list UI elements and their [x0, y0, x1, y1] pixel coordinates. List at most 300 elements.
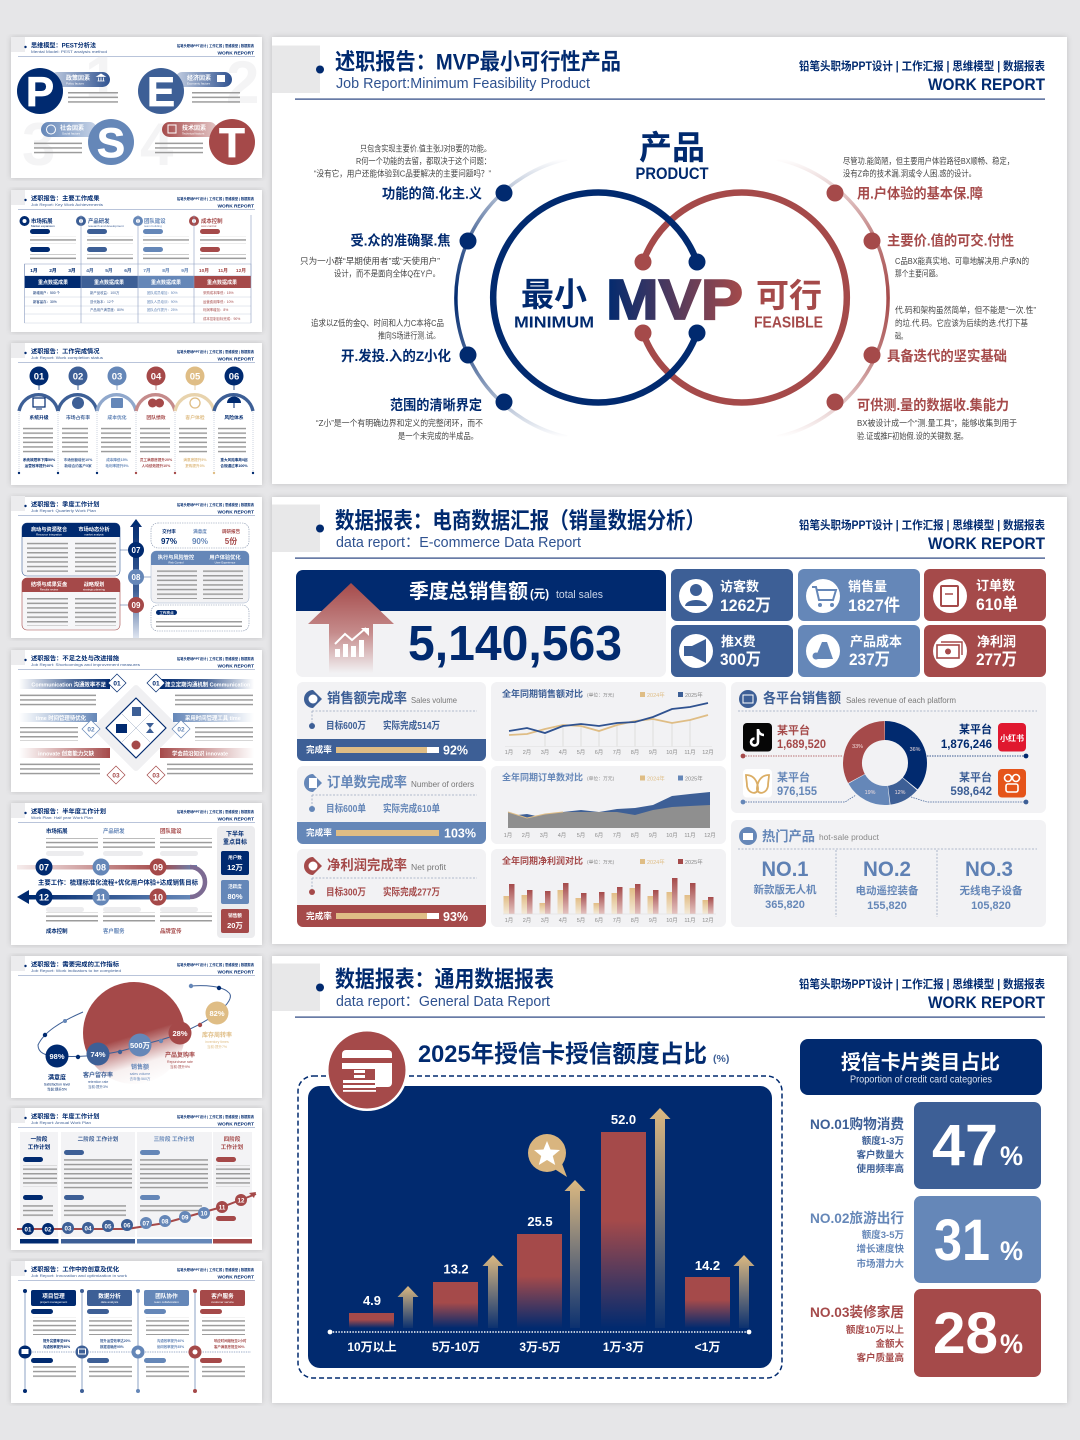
card headers: 数据分析: [98, 1292, 121, 1300]
key results bands: 重点数据成果: [38, 279, 68, 286]
card: profit completion: [297, 849, 486, 927]
panel header: 铅笔头职场PPT设计 | 工作汇报 | 思维模型 | 数据报表: [799, 518, 1045, 532]
panel: general data report: [272, 956, 1067, 1403]
card: profit completion: 完成率: [306, 910, 332, 921]
right column: features: 尽管功.能简陋，但主要用户体验路径BX顺畅、稳定，: [843, 156, 1014, 166]
left cards: 结项与成果复盘: [31, 580, 67, 588]
thumbnail header: 述职报告：工作中的创意及优化: [31, 1266, 120, 1274]
column labels: 风险体系: [224, 414, 244, 421]
chart: annual sales line comparison: 2024年: [647, 691, 665, 699]
month table: 7月: [143, 268, 151, 274]
column results: 系统故障率下降50%: [23, 457, 56, 462]
key results bands: 重点数据成果: [151, 279, 181, 286]
column headings: team building: [144, 224, 162, 228]
blue ring: [493, 192, 706, 403]
panel: hot-sale products: 热门产品: [762, 828, 815, 844]
PEST: T block: Technical factors: [182, 132, 205, 136]
category 28%: [810, 1289, 1041, 1377]
panel header: [272, 46, 1046, 100]
column headings: cost control: [201, 224, 217, 228]
PEST: S block: 社会因素: [60, 124, 84, 132]
card: orders completion: 订单数完成率: [327, 774, 407, 790]
panel header: WORK REPORT: [928, 534, 1046, 553]
platform: butterfly brand: 某平台: [777, 770, 810, 784]
stage headings: 一阶段: [31, 1135, 48, 1143]
chart: annual sales line comparison: 2025年: [685, 691, 703, 699]
thumbnail header: [11, 190, 255, 210]
PEST: P block: Policy factors: [66, 82, 84, 86]
card: profit completion: 目标300万: [326, 886, 366, 898]
thumbnail: annual work plan: [11, 1108, 262, 1250]
chart: annual sales line comparison: 11月: [684, 749, 696, 756]
left column: features: 受.众的准确聚.焦: [350, 232, 450, 248]
chart: annual orders area comparison: 2024年: [647, 774, 665, 782]
chart: annual profit bar comparison: 2月: [523, 917, 531, 924]
column labels: 成本优化: [107, 414, 127, 421]
platform: xiaohongshu: 1,876,246: [941, 739, 992, 751]
KPI: net profit: [924, 625, 1046, 677]
categories header: 授信卡片类目占比: [841, 1051, 1000, 1074]
column results: 人均绩效提升10%: [142, 463, 171, 468]
panel: platform revenue: [731, 682, 1046, 813]
left cards: 启动与资源整合: [31, 525, 68, 533]
thumbnail: PEST analysis: 4: [140, 111, 174, 178]
card: profit completion: 净利润完成率: [327, 857, 407, 873]
second half targets panel: 12万: [227, 863, 243, 872]
KPI: sales volume: 销售量: [848, 579, 887, 594]
card: orders completion: 103%: [444, 826, 476, 840]
platform: tiktok: 1,689,520: [777, 739, 826, 751]
card headers: 团队协作: [155, 1292, 178, 1300]
chart: annual profit bar comparison: 4月: [559, 917, 567, 924]
thumbnail: half year work plan: [11, 803, 262, 945]
month table: 1月: [30, 268, 38, 274]
card copy: [33, 1317, 245, 1380]
chart: annual profit bar comparison: 2025年: [685, 858, 703, 866]
card results: 提升完整率至95%: [43, 1338, 70, 1343]
thumbnail header: 述职报告：不足之处与改进措施: [31, 654, 120, 662]
thumbnail header: [11, 343, 255, 363]
numbered diamonds: 03: [112, 772, 120, 780]
indicator labels: inventory times: [205, 1040, 229, 1044]
donut labels: 19%: [865, 790, 876, 796]
gold arrows: [398, 1108, 754, 1328]
left column: features: “Z小”是一个有明确边界和定义的完整闭环，而不: [316, 418, 484, 428]
indicator nodes: 28%: [172, 1029, 188, 1038]
number badges: 04: [151, 372, 162, 382]
thumbnail header: Job Report: Work completion status: [31, 356, 103, 360]
PEST: E block: E: [147, 68, 175, 115]
PEST: P block: P: [26, 68, 54, 115]
category 28%: NO.03装修家居: [810, 1304, 904, 1320]
card results: 响应时间缩短至2小时: [214, 1338, 247, 1343]
panel: hot-sale products: 新款版无人机: [754, 883, 817, 896]
panel header: [272, 964, 1046, 1018]
chart: annual profit bar comparison: 2024年: [647, 858, 665, 866]
thumbnail header: 铅笔头职场PPT设计 | 工作汇报 | 思维模型 | 数据报表: [177, 349, 255, 354]
chart: annual sales line comparison: 全年同期销售额对比: [502, 688, 583, 699]
thumbnail: work indicators: [11, 956, 262, 1098]
chart: annual sales line comparison: 4月: [559, 749, 567, 756]
chart: annual profit bar comparison: 11月: [684, 917, 696, 924]
feasible label: FEASIBLE: [754, 314, 823, 332]
item headings: 产品研发: [103, 827, 125, 835]
chart: annual orders area comparison: 7月: [613, 832, 621, 839]
thumbnail header: 铅笔头职场PPT设计 | 工作汇报 | 思维模型 | 数据报表: [177, 1114, 255, 1119]
category 47%: 额度1-3万: [862, 1135, 904, 1147]
item headings: 品牌宣传: [160, 927, 182, 935]
right bars: 采用时间管理工具 time: [185, 714, 241, 722]
arches: [19, 395, 253, 411]
total sales card: 5,140,563: [408, 617, 622, 671]
thumbnail header: [11, 803, 255, 823]
indicator labels: 去年值:560万: [130, 1076, 151, 1081]
chart: annual orders area comparison: 12月: [704, 832, 716, 839]
panel: hot-sale products: 105,820: [971, 900, 1011, 912]
chart: annual orders area comparison: 10月: [666, 832, 678, 839]
thumbnail header: [11, 650, 255, 670]
thumbnail header: Mental Model: PEST analysis method: [31, 50, 107, 54]
left column: features: 只包含实现主要价.值主张J对B要的功能。: [360, 144, 491, 154]
second half targets panel: 20万: [227, 921, 243, 930]
platform: kuaishou: 598,642: [950, 786, 992, 798]
right column: features: 那个主要问题。: [895, 268, 942, 278]
indicator nodes: 74%: [90, 1050, 106, 1059]
thumbnail header: [11, 37, 255, 57]
axis labels: 10万以上: [347, 1340, 397, 1354]
thumbnail header: 铅笔头职场PPT设计 | 工作汇报 | 思维模型 | 数据报表: [177, 809, 255, 814]
numbered diamonds: 01: [113, 680, 121, 688]
column headings: [20, 216, 223, 228]
total sales card: (元): [530, 587, 549, 601]
chart: annual orders area comparison: 6月: [595, 832, 603, 839]
timeline nodes: 06: [124, 1222, 131, 1230]
stage tags: [23, 1150, 236, 1221]
chart: annual profit bar comparison: 7月: [613, 917, 621, 924]
number badges: 01: [34, 372, 45, 382]
results table: [24, 215, 251, 323]
category 31%: 31: [934, 1208, 990, 1273]
thumbnail: PEST analysis: 2: [226, 49, 259, 116]
chart: annual sales line comparison: 12月: [702, 749, 714, 756]
panel: platform revenue: 各平台销售额: [763, 690, 841, 706]
panel: MVP report: [272, 37, 1067, 484]
month table: 5月: [105, 268, 113, 274]
column labels: 市场占有率: [66, 414, 90, 421]
panel: hot-sale products: NO.1: [762, 858, 809, 881]
stage headings: 工作计划: [221, 1143, 244, 1151]
left cards: Resource integration: [36, 532, 62, 536]
indicator labels: Repurchase rate: [167, 1060, 193, 1064]
platform: xiaohongshu: 某平台: [959, 722, 992, 736]
indicator labels: 当前:提升3%: [88, 1084, 108, 1089]
left bars: innovate 创意能力欠缺: [38, 750, 95, 758]
category 31%: 额度3-5万: [862, 1229, 904, 1241]
panel header: WORK REPORT: [928, 75, 1046, 94]
thumbnail: quarterly work plan: [11, 496, 262, 638]
column results: 毛利率提升5%: [105, 463, 129, 468]
category 31%: NO.02旅游出行: [810, 1210, 904, 1226]
thumbnail header: 述职报告：季度工作计划: [31, 500, 100, 508]
chart: annual orders area comparison: 全年同期订单数对比: [502, 772, 583, 782]
product heading: [636, 129, 709, 183]
outer arc nodes: [460, 184, 880, 410]
bar values: 4.9: [363, 1293, 381, 1308]
results table: 新增用户：500 个: [33, 290, 61, 295]
axis icons: [18, 1346, 202, 1358]
item copy: [46, 838, 212, 922]
left column: features: 范围的清晰界定: [390, 397, 482, 413]
icon: credit card and coins: [326, 1029, 408, 1111]
thumbnail header: WORK REPORT: [218, 816, 254, 822]
card headers: data analysis: [101, 1300, 119, 1304]
left column: features: 只为一小群“早期使用者”或“天使用户”: [300, 256, 440, 266]
bar values: 52.0: [611, 1112, 636, 1127]
chart: annual orders area comparison: [491, 766, 726, 844]
column results: 复购提升3%: [185, 463, 206, 468]
work highlights box: 工作亮点: [159, 610, 174, 615]
KPI: promotion cost: 300万: [720, 650, 761, 669]
column results: 重大风险事故0起: [220, 457, 248, 462]
card results: 客户满意度提至90%: [214, 1344, 245, 1349]
KPI: sales volume: [798, 569, 920, 621]
right column: features: 的垃.代.码。它应该为后续的迭.代打下基: [895, 318, 1029, 328]
month table: 2月: [49, 268, 57, 274]
work highlights box: [151, 605, 249, 631]
numbered diamonds: 02: [87, 726, 95, 734]
category 47%: 47: [932, 1113, 998, 1178]
left cards: market analysis: [84, 532, 104, 536]
month table: 11月: [218, 268, 228, 274]
thumbnail: shortcomings and improvements: [11, 650, 262, 792]
main work line: 主要工作：梳理标准化流程+优化用户体验+达成销售目标: [38, 878, 199, 886]
thumbnail header: WORK REPORT: [218, 1274, 254, 1280]
chart: annual sales line comparison: 2月: [523, 749, 531, 756]
thumbnail header: 思维模型：PEST分析法: [31, 42, 96, 50]
timeline nodes: 12: [39, 892, 49, 902]
chart: annual orders area comparison: 9月: [649, 832, 657, 839]
chart: annual orders area comparison: 2月: [522, 832, 530, 839]
indicator nodes: [46, 1002, 228, 1068]
timeline nodes: 04: [85, 1226, 92, 1232]
chart: annual sales line comparison: 8月: [631, 749, 639, 756]
x axis: [328, 1330, 751, 1334]
results table: 产品用户满意度：80%: [90, 307, 124, 312]
thumbnail header: WORK REPORT: [218, 356, 254, 362]
key results bands: 重点数据成果: [207, 279, 237, 286]
categories header: Proportion of credit card categories: [850, 1074, 992, 1086]
donut labels: [852, 744, 921, 796]
right column: features: [843, 156, 1036, 441]
bar values: 14.2: [695, 1258, 720, 1273]
timeline nodes: 03: [65, 1226, 72, 1232]
bar values: 13.2: [443, 1262, 469, 1276]
card results: 沟通效率提升40%: [157, 1338, 184, 1343]
panel header: 述职报告：MVP最小可行性产品: [335, 50, 621, 74]
thumbnail header: 铅笔头职场PPT设计 | 工作汇报 | 思维模型 | 数据报表: [177, 962, 255, 967]
platform: butterfly brand: 976,155: [777, 786, 818, 798]
chart: annual orders area comparison: 8月: [631, 832, 639, 839]
column results: 合规通过率100%: [220, 463, 248, 468]
thumbnail header: [11, 956, 255, 976]
card: sales completion: Sales volume: [411, 695, 457, 705]
card: sales completion: 目标600万: [326, 719, 366, 732]
results table: 新客留存：30%: [33, 299, 57, 304]
results table: 利润率增加：8%: [203, 307, 228, 312]
timeline nodes: 10: [201, 1210, 208, 1218]
left cards: Results review: [40, 588, 59, 592]
right column: features: 用.户体验的基本保.障: [857, 186, 983, 202]
PEST: S block: [34, 119, 134, 166]
chart: annual orders area comparison: 2025年: [685, 774, 703, 782]
panel header: data report：General Data Report: [336, 994, 550, 1010]
minimum label: 最小: [521, 276, 587, 313]
item headings: 客户服务: [103, 927, 125, 935]
second half targets panel: 下半年: [226, 830, 244, 838]
thumbnail header: 铅笔头职场PPT设计 | 工作汇报 | 思维模型 | 数据报表: [177, 502, 255, 507]
timeline nodes: 07: [143, 1220, 150, 1228]
thumbnail header: 铅笔头职场PPT设计 | 工作汇报 | 思维模型 | 数据报表: [177, 43, 255, 48]
card results: [43, 1338, 247, 1349]
thumbnail header: Job Report: Innovation and optimization in work: [31, 1274, 127, 1278]
right KPI box: 交付率: [162, 528, 176, 535]
category 28%: 额度10万以上: [846, 1324, 904, 1336]
chart: annual sales line comparison: 1月: [505, 749, 513, 756]
card: profit completion: 实际完成277万: [383, 886, 440, 898]
category 47%: %: [1000, 1141, 1023, 1171]
card: orders completion: 目标600单: [326, 802, 366, 815]
thumbnail: work completion status: [11, 343, 262, 485]
card: orders completion: 完成率: [306, 826, 332, 838]
column tags and copy: [30, 229, 246, 262]
month table: 9月: [181, 268, 189, 274]
category 28%: 28: [933, 1301, 998, 1366]
platform: tiktok: 某平台: [777, 723, 810, 737]
category 31%: %: [1000, 1236, 1023, 1266]
second half targets panel: 重点目标: [223, 838, 247, 846]
indicator labels: 当前:提升9%: [170, 1064, 190, 1069]
timeline nodes: 08: [96, 862, 106, 872]
right plan card: 执行与风险管控: [158, 553, 195, 561]
indicator labels: 销售额: [131, 1063, 149, 1071]
results table: 运营费用降低：10%: [203, 299, 234, 304]
results table: 团队人员培训：90%: [147, 299, 178, 304]
center spine: 07: [132, 546, 141, 555]
card results: 协同效率提升35%: [157, 1344, 184, 1349]
right bars: 学会前沿知识 innovate: [172, 750, 228, 758]
number badges: [30, 366, 244, 386]
PEST: T block: T: [219, 119, 245, 166]
thumbnail header: 铅笔头职场PPT设计 | 工作汇报 | 思维模型 | 数据报表: [177, 656, 255, 661]
column results: 员工满意度提升20%: [140, 457, 173, 462]
right column: features: C品BX能真实地、可靠地解决用.户承N的: [895, 256, 1029, 266]
chart: annual profit bar comparison: 12月: [702, 917, 714, 924]
column labels: 客户体验: [185, 414, 205, 421]
thumbnail header: Job Report: Annual Work Plan: [31, 1121, 91, 1125]
left cards: 战略规划: [84, 580, 104, 588]
chart: annual sales line comparison: [491, 682, 726, 761]
thumbnail: innovation and optimization: [11, 1261, 262, 1403]
KPI: product cost: [798, 625, 920, 677]
panel: hot-sale products: [731, 820, 1046, 927]
chart: annual profit bar comparison: 8月: [631, 917, 639, 924]
left column: features: 开.发投.入的Z小化: [341, 348, 451, 364]
right KPI box: 97%: [161, 537, 177, 546]
PEST: E block: Economic factors: [187, 82, 211, 86]
key results bands: [24, 276, 251, 288]
thumbnail header: [11, 1261, 255, 1281]
left bars: Communication 沟通效率不足: [31, 680, 107, 688]
card headers: customer service: [211, 1300, 234, 1304]
stems: [39, 385, 234, 390]
stage headings: 四阶段: [224, 1135, 241, 1143]
column results: [23, 457, 248, 468]
right plan card: 用户体验优化: [209, 553, 241, 561]
orbit dots: [43, 984, 221, 1059]
card: sales completion: 完成率: [306, 744, 332, 754]
small icons: [33, 397, 241, 409]
card: profit completion: Net profit: [411, 862, 447, 872]
card: orders completion: [297, 766, 486, 844]
donut labels: 36%: [910, 747, 921, 753]
results table: 团队成员增加：50%: [147, 290, 178, 295]
panel header: 铅笔头职场PPT设计 | 工作汇报 | 思维模型 | 数据报表: [799, 977, 1045, 991]
chart: annual sales line comparison: (单位：万元): [587, 692, 615, 698]
timeline nodes: 07: [39, 862, 49, 872]
left column: features: 追求以Z低的金Q、时间和人力C本将C品: [311, 318, 444, 328]
minimum label: MINIMUM: [514, 314, 594, 332]
panel: hot-sale products: NO.2: [863, 858, 911, 881]
minimum label: [514, 276, 594, 332]
card headers: [31, 1290, 245, 1306]
right plan card: [151, 551, 249, 603]
category 28%: %: [1000, 1329, 1023, 1359]
center diamond: [96, 688, 176, 768]
chart: annual sales line comparison: 10月: [666, 749, 678, 756]
indicator labels: 库存周转率: [202, 1031, 232, 1039]
axis labels: 3万-5万: [519, 1340, 561, 1354]
right column: features: 没有Z命的技术漏.洞或令人困.惑的设计。: [843, 168, 976, 178]
indicator labels: [44, 1031, 232, 1092]
feasible label: 可行: [756, 277, 822, 314]
axis labels: <1万: [695, 1340, 720, 1354]
panel header: 铅笔头职场PPT设计 | 工作汇报 | 思维模型 | 数据报表: [799, 59, 1045, 73]
column results: 满意度提升5%: [183, 457, 207, 462]
bars: [349, 1132, 730, 1328]
column results: 运营效率提升40%: [25, 463, 54, 468]
column headings: 市场拓展: [31, 217, 53, 225]
right column: features: BX被设计成一个“测.量工具”，能够收集到用于: [857, 418, 1017, 428]
second half targets panel: 活跃度: [228, 883, 242, 890]
timeline track: [17, 865, 205, 904]
chart: annual orders area comparison: 4月: [558, 832, 566, 839]
number badges: 03: [112, 372, 122, 382]
month table: 6月: [124, 268, 132, 274]
item headings: 成本控制: [46, 927, 68, 935]
thumbnail header: Job Report: Work indicators to be completed: [31, 969, 121, 973]
chart: annual orders area comparison: 3月: [540, 832, 548, 839]
KPI: visitors: 访客数: [720, 579, 759, 594]
orbit path: [38, 986, 230, 1057]
card: sales completion: [297, 682, 486, 761]
indicator labels: sales volume: [130, 1072, 150, 1076]
rising timeline: [17, 1192, 256, 1229]
column headings: 成本控制: [201, 217, 223, 225]
platform: kuaishou: [911, 769, 1028, 804]
red ring: [634, 193, 847, 403]
card tags: [31, 1309, 222, 1363]
second half targets panel: [217, 826, 255, 938]
